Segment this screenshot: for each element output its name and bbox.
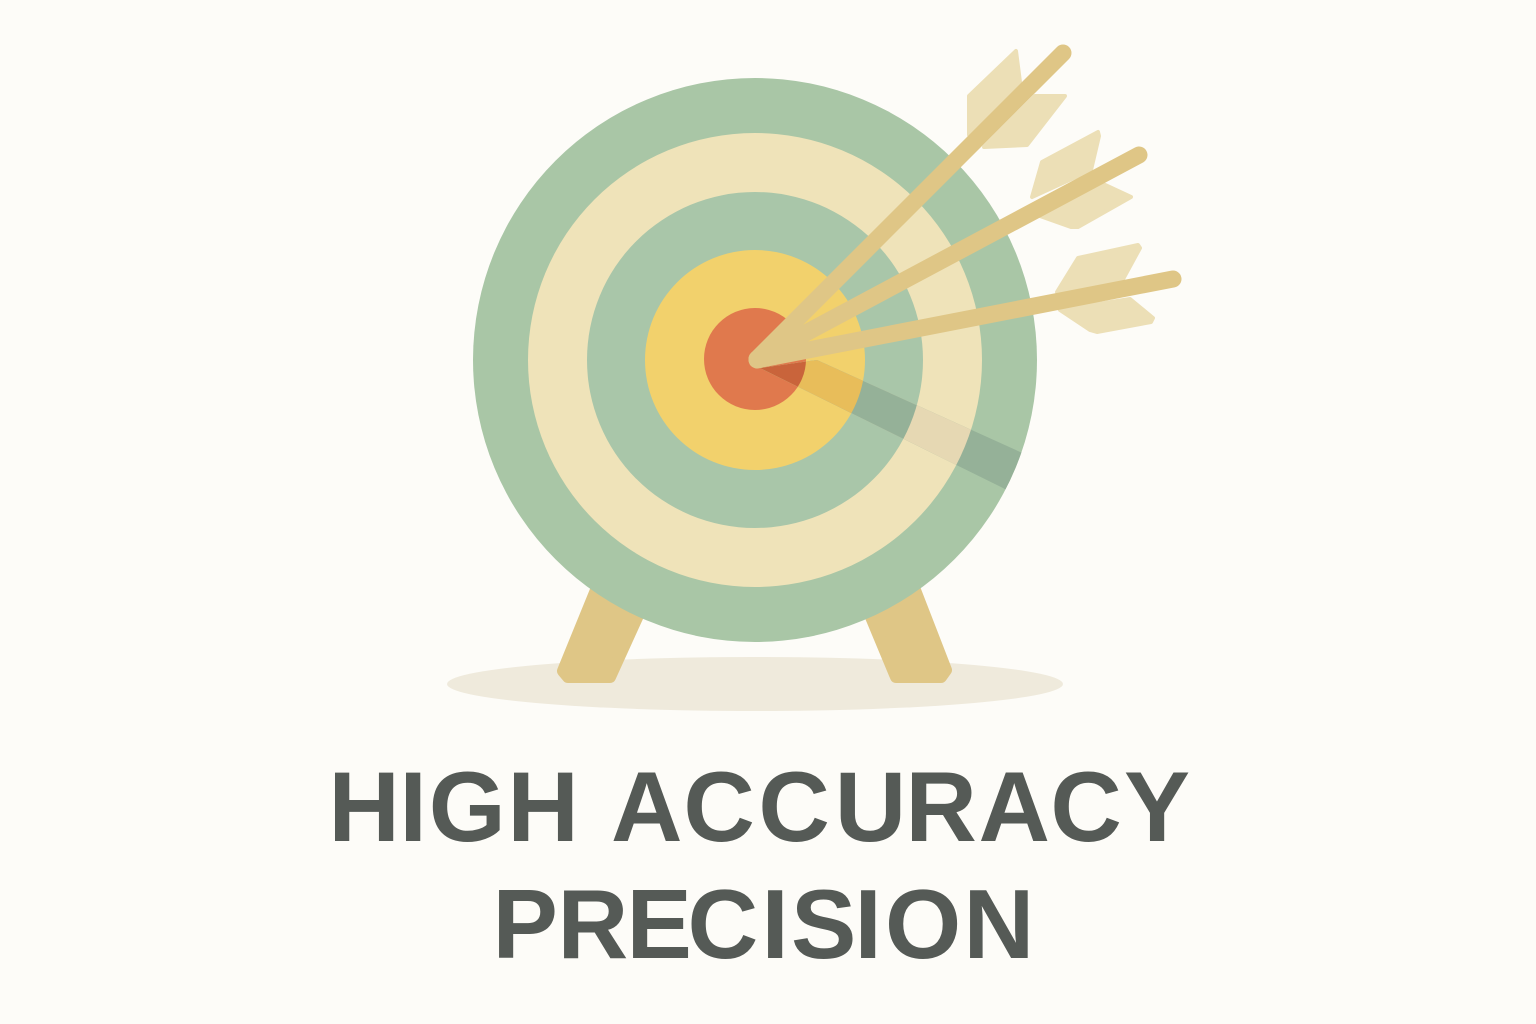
- title line 2: PRECISION: [492, 869, 1034, 979]
- arrow 1: top: [757, 51, 1065, 359]
- infographic: target with arrows: [335, 44, 1188, 959]
- outer green ring: [473, 78, 1037, 642]
- left leg: [563, 590, 645, 677]
- stand legs: [563, 590, 946, 677]
- fletching: [1032, 132, 1131, 227]
- shaft: [757, 155, 1139, 359]
- arrow shadow on target: [760, 360, 1022, 490]
- red bullseye: [704, 308, 806, 410]
- yellow ring: [645, 250, 865, 470]
- inner green ring: [587, 192, 923, 528]
- shaft: [757, 279, 1173, 360]
- arrow 2: middle: [757, 132, 1139, 359]
- arrow 3: lower: [757, 245, 1173, 360]
- fletching: [969, 51, 1065, 147]
- right leg: [866, 590, 946, 677]
- target board: [473, 78, 1037, 642]
- shaft: [757, 53, 1063, 359]
- ground shadow: [447, 657, 1063, 711]
- title line 1: HIGH ACCURACY: [328, 751, 1190, 862]
- cream ring: [528, 133, 982, 587]
- title: [328, 751, 1190, 979]
- fletching: [1057, 245, 1153, 332]
